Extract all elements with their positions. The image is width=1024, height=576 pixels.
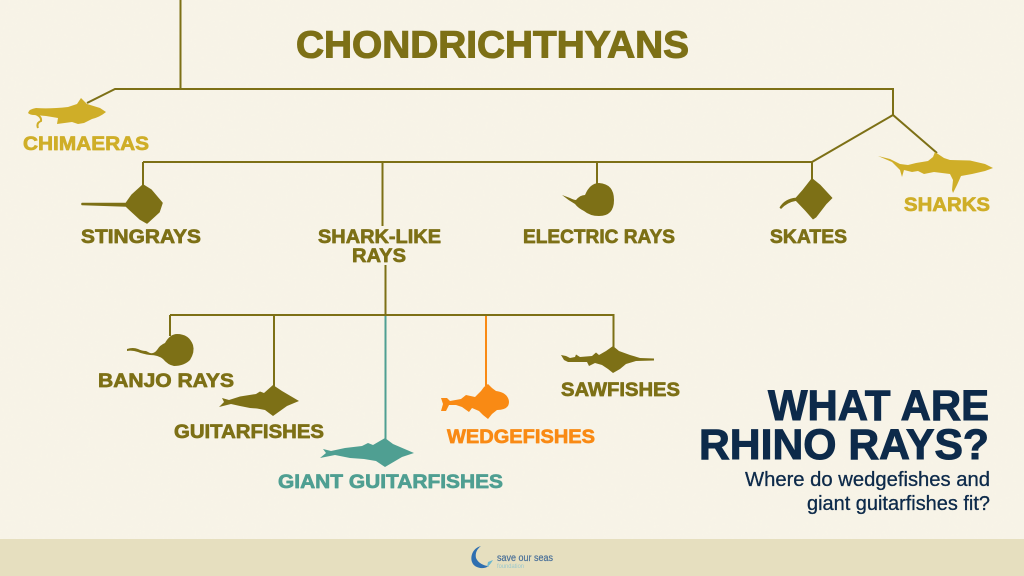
label: chimaeras: CHIMAERAS (23, 134, 149, 155)
label: shark-like rays: RAYS (352, 246, 406, 267)
subheading: Where do wedgefishes and (745, 469, 990, 491)
label: wedgefishes: WEDGEFISHES (447, 427, 595, 448)
label: electric rays: ELECTRIC RAYS (523, 227, 675, 248)
logo subline: foundation (497, 564, 524, 570)
title: CHONDRICHTHYANS (296, 24, 689, 66)
label: banjo rays: BANJO RAYS (98, 371, 234, 392)
heading: what are rhino rays: RHINO RAYS? (699, 421, 989, 469)
teal branch to giant guitarfishes (384, 316, 386, 440)
logo: save our seas foundation (471, 546, 553, 568)
label: skates: SKATES (770, 227, 847, 248)
label: giant guitarfishes: GIANT GUITARFISHES (278, 472, 503, 493)
label: sawfishes: SAWFISHES (561, 380, 680, 401)
logo wordmark: save our seas (497, 553, 553, 564)
label: guitarfishes: GUITARFISHES (174, 422, 324, 443)
footer band (0, 539, 1024, 576)
icon: wave (471, 546, 493, 568)
heading: what are rhino rays: WHAT ARE (768, 382, 989, 430)
icon: shark (878, 152, 993, 193)
icon: banjo ray (127, 334, 194, 366)
orange branch to wedgefishes (485, 316, 487, 386)
icon: sawfish (561, 346, 654, 373)
label: shark-like rays (318, 227, 441, 267)
icon: wedgefish (441, 384, 509, 419)
tree connector lines (87, 0, 937, 387)
icon: guitarfish (219, 385, 299, 416)
label: shark-like rays: SHARK-LIKE (318, 227, 441, 248)
icon: electric ray (562, 183, 614, 216)
subheading (745, 469, 990, 515)
label: sharks: SHARKS (904, 195, 990, 216)
icon: skate (780, 178, 832, 219)
icon: stingray (82, 185, 162, 223)
label: stingrays: STINGRAYS (81, 227, 201, 248)
icon: giant guitarfish (320, 438, 414, 467)
heading: what are rhino rays (699, 382, 989, 469)
subheading: giant guitarfishes fit? (807, 493, 990, 515)
icon: chimaera (28, 98, 106, 128)
